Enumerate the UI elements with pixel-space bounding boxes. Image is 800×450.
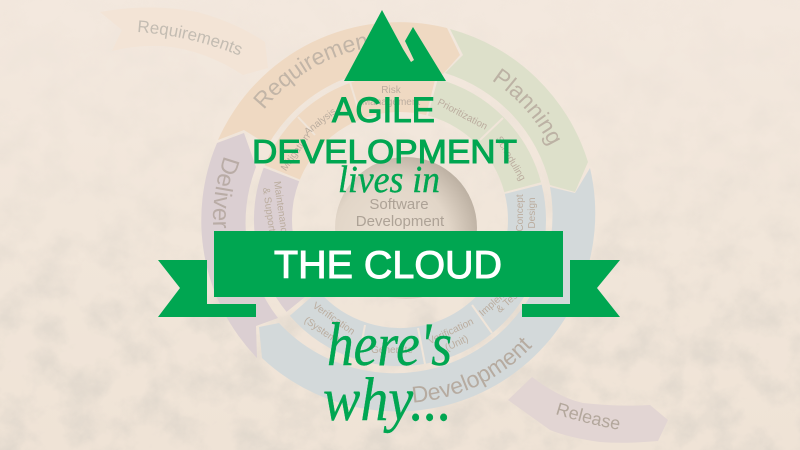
heading: agile development: AGILE [332, 91, 435, 130]
heading: agile development [252, 91, 517, 170]
inner ring labels: Generate [371, 345, 413, 356]
ribbon banner [158, 231, 620, 317]
inner ring segments [221, 41, 579, 399]
outer segment: deliver [201, 133, 278, 358]
inner ring labels: Design [527, 197, 538, 229]
closing text: here's why [323, 312, 452, 434]
inner ring labels: (Unit) [444, 334, 470, 354]
ribbon right tail [522, 260, 620, 317]
faded lifecycle wheel diagram [138, 20, 668, 442]
banner text: the cloud: THE CLOUD [274, 244, 502, 287]
central circle: Software [369, 196, 429, 213]
outer segment: requirements [218, 22, 460, 145]
icon: green mountain [344, 10, 446, 81]
flag: release [508, 378, 668, 442]
closing text: here's why: here's [327, 312, 452, 379]
inner ring labels: Prioritization [435, 97, 489, 133]
inner ring labels [260, 85, 538, 356]
flag: requirements: Requirements [138, 20, 242, 55]
inner ring labels: & Test [494, 289, 522, 315]
flag: release: Release [556, 402, 620, 430]
inner ring labels: Verification [426, 316, 475, 347]
subheading: lives in: lives in [338, 159, 440, 201]
central circle [335, 157, 477, 299]
background [0, 235, 800, 450]
outer segment: planning [445, 29, 588, 192]
inner ring labels: Analysis [302, 106, 339, 138]
inner ring labels: Scheduling [493, 135, 527, 183]
central circle: Development [356, 213, 445, 230]
inner ring labels: Verification [310, 300, 357, 337]
closing text: here's why: why... [323, 367, 452, 434]
inner ring labels: Implement [477, 279, 520, 319]
inner ring labels: Risk [381, 85, 402, 96]
ribbon main panel [214, 231, 563, 297]
inner ring labels: & Support [260, 187, 277, 233]
outer segment: requirements: Requirements [253, 32, 370, 108]
inner ring labels: Management [362, 97, 420, 108]
outer segment: development [259, 168, 596, 412]
outer segment: deliver: Deliver [212, 158, 240, 228]
inner ring labels: Mitigation [279, 132, 313, 173]
inner ring labels: Concept [515, 194, 526, 232]
ribbon left tail [158, 260, 256, 317]
inner ring labels: (System) [302, 315, 341, 347]
heading: agile development: DEVELOPMENT [252, 133, 517, 170]
outer segment: development: Development [412, 338, 532, 402]
outer segment: planning: Planning [493, 68, 560, 146]
inner ring labels: Maintenance [271, 181, 290, 239]
